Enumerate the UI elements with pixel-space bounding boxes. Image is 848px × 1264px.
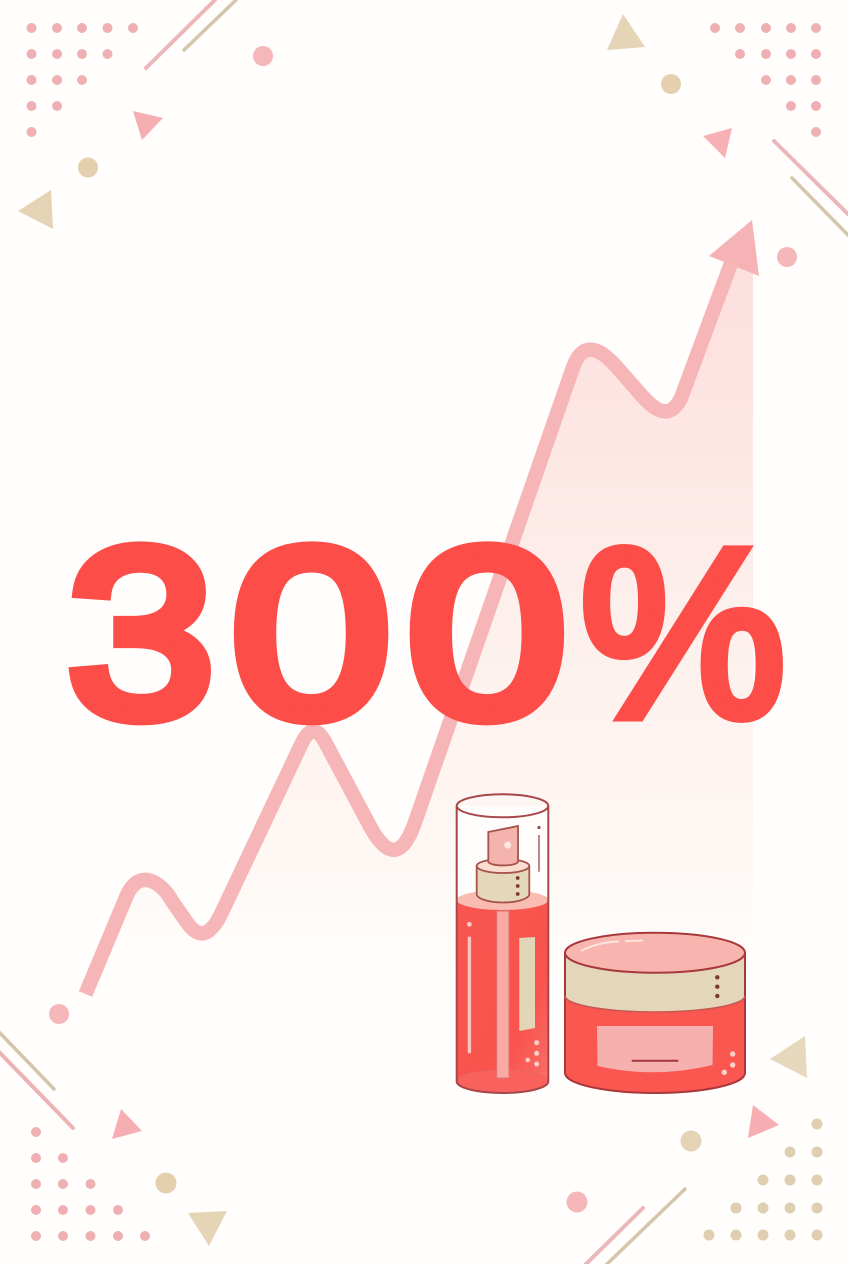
decoration: bottom-left cluster [0, 1004, 227, 1246]
decoration: bottom-right cluster [566, 1036, 822, 1264]
icon: cream jar [565, 933, 745, 1093]
headline number: % [580, 499, 786, 767]
headline number: 00 [231, 500, 567, 768]
chart: rising growth line with arrow [86, 220, 759, 994]
headline number: 3 [67, 499, 215, 767]
chart: area under growth line [86, 240, 753, 994]
decoration: top-left cluster [18, 0, 273, 229]
decoration: top-right cluster [607, 14, 848, 267]
headline number [67, 499, 786, 768]
icon: spray bottle [457, 794, 548, 1093]
